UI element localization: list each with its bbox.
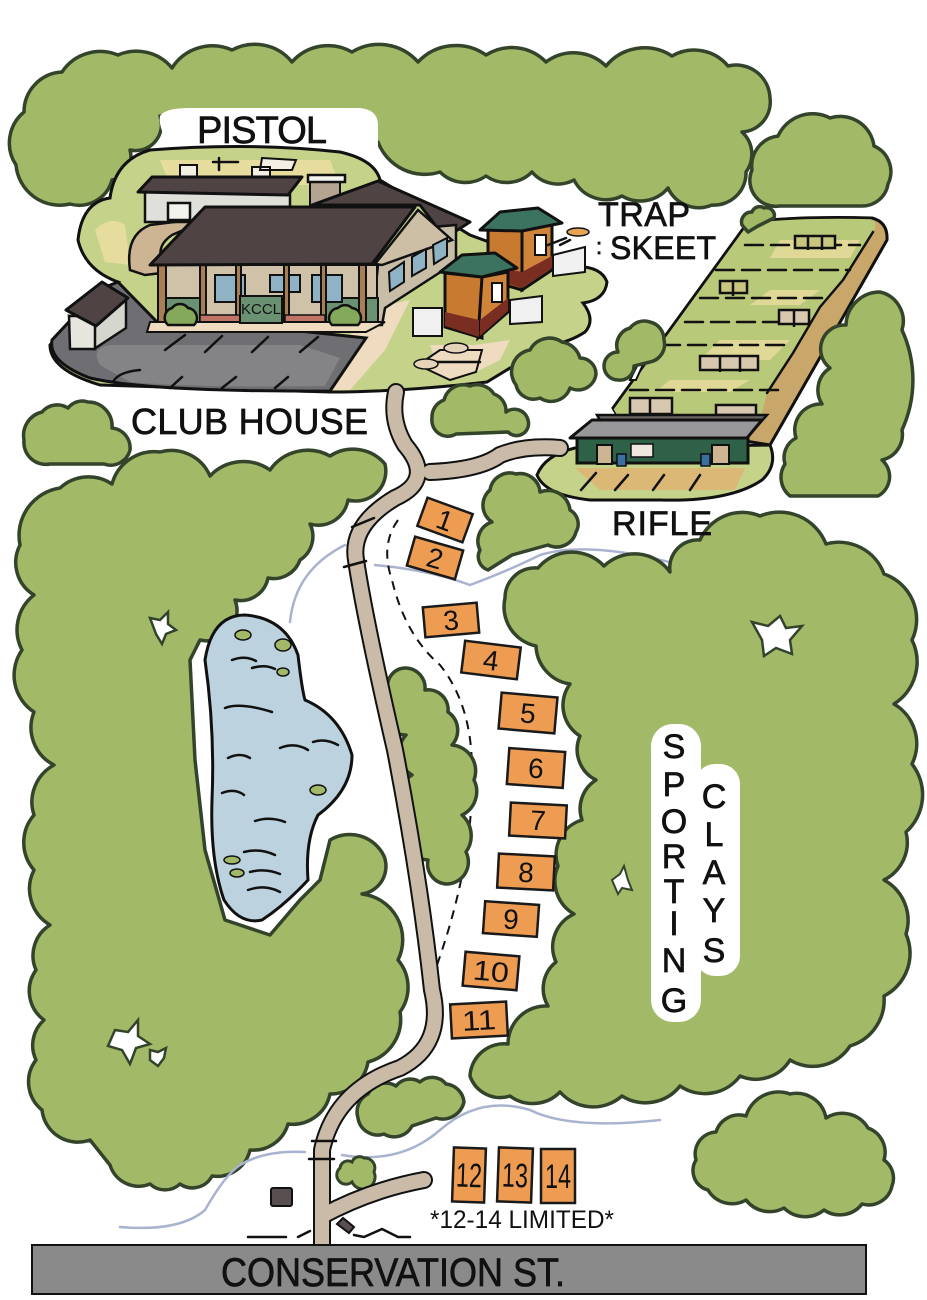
road: conservation st [32, 1245, 866, 1294]
sign 5: 5 [519, 697, 537, 730]
heading: clays: Y [703, 892, 725, 930]
planters [165, 298, 378, 322]
pale lawn patches [95, 160, 340, 265]
side wall [372, 225, 456, 325]
heading: clays [702, 778, 726, 970]
tree holes left [108, 612, 176, 1066]
dirt path [129, 220, 195, 275]
symbol: and: : [596, 234, 602, 259]
sign 14: 14 [545, 1158, 571, 1196]
heading: sporting: O [661, 803, 687, 841]
porch [147, 322, 385, 332]
heading: trap: TRAP [598, 196, 690, 234]
sign 8 [497, 854, 555, 890]
sign 5 [499, 693, 557, 733]
KCCL sign: KCCL [241, 301, 281, 318]
sign 1 [417, 498, 473, 543]
sign 12 [452, 1147, 486, 1203]
doors and window [215, 275, 342, 302]
fence back [553, 247, 585, 276]
tree: small left [24, 401, 130, 465]
heading: clays: S [703, 932, 725, 970]
sporting clays label backgrounds [651, 724, 740, 1022]
tree: near sign 1-2 [478, 473, 578, 570]
posts [158, 265, 366, 322]
sign 14 [541, 1149, 575, 1203]
heading: sporting: G [661, 982, 687, 1020]
heading: clays: A [703, 854, 726, 892]
shed: parking [66, 282, 128, 349]
heading: sporting: S [663, 728, 685, 766]
back roof [312, 181, 470, 238]
road [322, 392, 560, 1250]
heading: clays: L [705, 816, 723, 854]
parking lines [113, 335, 318, 388]
tree holes right [752, 616, 802, 656]
fence front [413, 296, 542, 336]
field edge [613, 218, 887, 445]
sign 11: 11 [461, 1004, 497, 1037]
tree: lower middle [357, 1077, 464, 1137]
lawn [50, 146, 607, 392]
note: 12-14 limited: *12-14 LIMITED* [430, 1206, 614, 1234]
parking lot [52, 282, 366, 391]
heading: conservation st: CONSERVATION ST. [221, 1251, 565, 1295]
sign 1: 1 [432, 503, 457, 538]
tree: left big [14, 449, 408, 1190]
sign 8: 8 [517, 857, 535, 888]
target frames [630, 236, 835, 415]
club house grounds [50, 146, 607, 392]
side gable [375, 210, 452, 265]
club house building [147, 181, 470, 332]
dashed trail [387, 520, 472, 965]
tree: below trap left [432, 385, 529, 436]
tree: upper right [750, 114, 891, 206]
rifle building [570, 415, 767, 466]
label background: pistol [160, 108, 378, 146]
lot highlight [97, 345, 340, 386]
sign 2: 2 [423, 541, 447, 576]
heading: sporting [661, 728, 687, 1020]
heading: clays: C [702, 778, 726, 816]
rock and debris [248, 1188, 410, 1237]
front wall [165, 265, 377, 323]
trap house sheds [413, 208, 589, 338]
shrubs [165, 304, 361, 325]
clay disc [567, 228, 589, 236]
range field [613, 218, 887, 445]
tree: right big [470, 512, 923, 1107]
tree: below trap right [512, 338, 596, 401]
water ripples [222, 658, 338, 892]
sign 4: 4 [481, 644, 501, 677]
tree: top canopy [9, 44, 770, 208]
chimney [310, 180, 340, 205]
sign 3: 3 [442, 604, 460, 637]
heading: skeet: SKEET [610, 230, 716, 266]
tree: center strip [380, 668, 477, 884]
heading: sporting: R [662, 838, 686, 876]
streams [120, 545, 680, 1228]
heading: rifle: RIFLE [612, 505, 712, 543]
heading: sporting: I [669, 905, 679, 943]
pistol range building [138, 158, 345, 222]
sign 10 [463, 952, 519, 990]
front shed [445, 273, 482, 338]
sign 13: 13 [501, 1157, 529, 1195]
sign 4 [461, 641, 521, 679]
targets [180, 158, 296, 178]
tree: range left [604, 321, 665, 380]
field bands [655, 240, 860, 392]
back shed [488, 230, 522, 290]
heading: sporting: N [662, 942, 686, 980]
heading: pistol: PISTOL [197, 110, 327, 152]
sign 12: 12 [455, 1157, 483, 1195]
tree: small bush [337, 1157, 375, 1189]
shrub: range top [742, 207, 774, 232]
patio shape [414, 343, 482, 380]
field right inner edge [767, 232, 873, 393]
tree: right of range [781, 292, 913, 496]
bridge marks [309, 518, 374, 1159]
sign 13 [497, 1147, 533, 1203]
tree: lower right [693, 1092, 893, 1217]
sign 10: 10 [472, 954, 510, 989]
sign 9: 9 [502, 903, 520, 936]
station signs [407, 498, 575, 1203]
steps [200, 315, 325, 322]
sign 2 [407, 537, 463, 580]
heading: sporting: T [664, 873, 684, 911]
windows [389, 238, 447, 291]
lily pads [224, 630, 326, 877]
main roof [150, 207, 415, 265]
sign 7 [509, 803, 567, 838]
sign 7: 7 [529, 805, 547, 836]
firing lines [630, 245, 860, 390]
heading: sporting: P [663, 766, 685, 804]
sign 3 [423, 603, 479, 638]
sign 6: 6 [527, 752, 545, 785]
sign 6 [507, 748, 565, 788]
walkway [330, 300, 510, 390]
sign 11 [450, 1002, 508, 1038]
heading: club house: CLUB HOUSE [131, 401, 368, 442]
KCCL sign [240, 296, 282, 323]
sign 9 [483, 901, 539, 937]
rifle grounds [537, 445, 773, 500]
pond [205, 615, 352, 921]
